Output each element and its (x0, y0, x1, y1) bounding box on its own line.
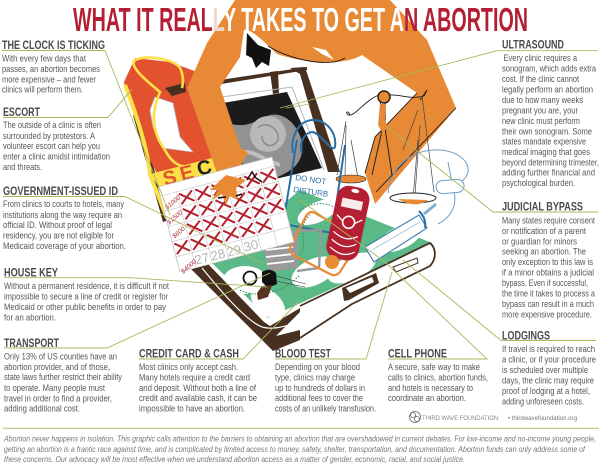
title: WHAT IT REALLY TAKES TO GET AN ABORTION (73, 1, 528, 38)
heading: BLOOD TEST (275, 348, 331, 360)
body text: The outside of a clinic is often (3, 120, 101, 130)
vest label (161, 145, 250, 191)
icon: blood drop (325, 255, 339, 269)
panel: the clock is ticking (2, 40, 105, 94)
calendar prices: $1000 (163, 194, 183, 212)
panel: cell phone (388, 348, 488, 403)
body text: and threats. (3, 162, 42, 172)
body text: Many hotels require a credit card (139, 372, 250, 382)
body text (139, 362, 257, 413)
body text: seeking an abortion. The (502, 246, 586, 256)
orange fingers (210, 175, 246, 205)
calendar prices: $600 (170, 225, 187, 241)
calendar dates: 30 (242, 237, 260, 255)
body text: due to how many weeks (502, 95, 583, 105)
heading: HOUSE KEY (4, 268, 58, 280)
heading: TRANSPORT (4, 338, 59, 350)
icon: government ID card (260, 230, 321, 272)
panel: lodgings (502, 330, 596, 407)
body text (388, 362, 488, 403)
icon: cell phone (324, 184, 372, 263)
illustration: suitcase and figure (124, 0, 468, 351)
body text: proof of lodging at a hotel, (502, 386, 590, 396)
heading: ESCORT (3, 107, 40, 119)
body text: and deposit. Without both a line of (139, 383, 256, 393)
body text: impossible to have an abortion. (139, 403, 245, 413)
body text (2, 54, 100, 94)
body text: more expensive – and fewer (2, 74, 96, 84)
body text (3, 120, 110, 172)
body text: calls to clinics, abortion funds, (388, 372, 488, 382)
green suitcase lining (212, 190, 432, 325)
calendar dates: 28 (209, 246, 227, 264)
body text: abortion provider, and of those, (4, 362, 110, 372)
body text: From clinics to courts to hotels, many (3, 199, 124, 209)
icon: hair (246, 33, 271, 68)
red crosses (163, 169, 288, 254)
suitcase body (190, 243, 435, 351)
calendar prices (163, 194, 199, 276)
body text (275, 362, 376, 413)
body text: pregnant you are, your (502, 106, 578, 116)
body text: state laws further restrict their ability (4, 372, 122, 382)
black marks (218, 172, 262, 198)
body text: Medicaid coverage of your abortion. (3, 241, 126, 251)
body text (4, 281, 169, 322)
body text: additional fees to cover the (275, 393, 363, 403)
heading: THE CLOCK IS TICKING (2, 40, 105, 52)
body text: or notification of a parent (502, 226, 586, 236)
vest label: E (178, 161, 196, 186)
body text: type, clinics may charge (275, 372, 355, 382)
body text: credit and available cash, it can be (139, 393, 257, 403)
body text: to operate. Many people must (4, 383, 105, 393)
body text: and hotels is necessary to (388, 383, 473, 393)
icon: do not disturb door hanger (283, 120, 345, 233)
icon: house key (244, 270, 306, 300)
suitcase lid and straps (220, 67, 340, 172)
body text (4, 352, 122, 414)
body text: is scheduled over multiple (502, 365, 588, 375)
foundation name: THIRD WAVE FOUNDATION (422, 415, 498, 422)
heading: LODGINGS (502, 330, 550, 342)
icon: syringe (365, 179, 465, 262)
arm outline (268, 46, 456, 192)
leader lines (2, 50, 598, 359)
body text: psychological burden. (502, 178, 575, 188)
body text (3, 199, 126, 251)
body text: Most clinics only accept cash. (139, 362, 238, 372)
body text: for an abortion. (4, 312, 56, 322)
body text: adding additional cost. (4, 404, 80, 414)
panel: ultrasound (502, 40, 599, 188)
body text: coordinate an abortion. (388, 393, 466, 403)
calendar dates (193, 237, 260, 268)
body text: adding unforeseen costs. (502, 397, 584, 407)
heading: JUDICIAL BYPASS (502, 202, 583, 214)
heading: ULTRASOUND (502, 40, 564, 52)
panel: government-issued id (3, 186, 126, 251)
icon: foundation logo (410, 412, 420, 422)
body text: passes, an abortion becomes (2, 64, 100, 74)
body text: volunteer escort can help you (3, 141, 100, 151)
footer statement: these concerns. Our advocacy will be most effective when we understand abortion access as a matter of gender, economic, racial, and social justice. (4, 455, 465, 464)
body text: enter a clinic amidst intimidation (3, 152, 110, 162)
foundation website: • thirdwavefoundation.org (508, 415, 577, 422)
body text: Without a permanent residence, it is difficult if not (4, 281, 169, 291)
icon: scales (336, 90, 436, 204)
body text: Depending on your blood (275, 362, 360, 372)
body text: or guardian for minors (502, 236, 577, 246)
body text: With every few days that (2, 54, 86, 64)
icon: highlight (312, 47, 334, 60)
panel: judicial bypass (502, 202, 595, 320)
heading: CELL PHONE (388, 348, 447, 360)
body text: A secure, safe way to make (388, 362, 480, 372)
icon: red escort vest (124, 58, 250, 222)
calendar prices: $1500 (165, 209, 185, 227)
calendar (158, 157, 294, 276)
body text: clinics will perform them. (2, 84, 83, 94)
body text: surrounded by protestors. A (3, 131, 95, 141)
calendar dates: 27 (193, 250, 211, 268)
vest label: R (230, 145, 250, 170)
body text: impossible to secure a line of credit or register for (4, 292, 168, 302)
heading: GOVERNMENT-ISSUED ID (3, 186, 118, 198)
icon: do not disturb door hanger: DISTURB (293, 185, 329, 199)
body text: up to hundreds of dollars in (275, 383, 365, 393)
vest label: C (195, 156, 214, 181)
calendar grid (160, 166, 294, 272)
icon: do not disturb door hanger: DO NOT (295, 173, 327, 186)
body text: travel in order to find a provider, (4, 394, 112, 404)
body text: official ID. Without proof of legal (3, 220, 112, 230)
heading: CREDIT CARD & CASH (139, 348, 239, 360)
panel: transport (4, 338, 122, 414)
panel: credit card and cash (139, 348, 257, 413)
calendar dates: 29 (225, 242, 243, 260)
ultrasound image (223, 92, 322, 185)
calendar prices: $4000 (179, 258, 199, 276)
icon: blue outline loop (388, 150, 468, 224)
body text: institutions along the way require an (3, 210, 122, 220)
body text: costs of an unlikely transfusion. (275, 403, 376, 413)
icon: credit card outline (290, 212, 358, 275)
body text: Medicaid or other public benefits in order to pay (4, 302, 166, 312)
body text (502, 53, 599, 188)
body text (502, 344, 596, 407)
body text: new clinic must perform (502, 116, 580, 126)
panel: escort (3, 107, 110, 172)
vest label: S (161, 166, 179, 191)
orange figure (187, 0, 456, 204)
panel: house key (4, 268, 169, 322)
body text (502, 216, 595, 320)
body text: residency, you are not eligible for (3, 230, 114, 240)
icon: suitcase handle (342, 273, 379, 301)
body text: cost. If the clinic cannot (502, 74, 579, 84)
body text: Only 13% of US counties have an (4, 352, 117, 362)
footer statement (3, 434, 596, 464)
body text: Every clinic requires a (504, 53, 577, 63)
panel: blood test (275, 348, 376, 413)
third wave foundation credit (410, 412, 577, 422)
